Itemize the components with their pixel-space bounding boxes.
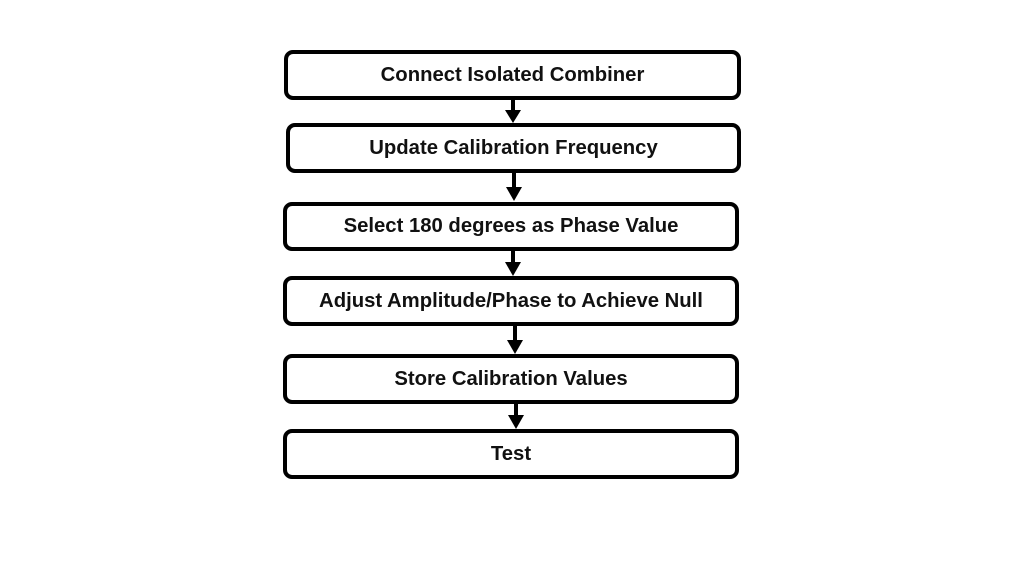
step 2 box xyxy=(286,123,741,173)
step 4 box xyxy=(283,276,739,326)
step 1 box xyxy=(284,50,741,100)
arrow 3 xyxy=(505,251,521,276)
arrow 4 xyxy=(507,326,523,354)
step 2 box: Update Calibration Frequency xyxy=(369,136,658,158)
step 1 box: Connect Isolated Combiner xyxy=(381,64,644,86)
step 6 box: Test xyxy=(491,442,531,464)
step 5 box xyxy=(283,354,739,404)
arrow 1 xyxy=(505,100,521,123)
step 6 box xyxy=(283,429,739,479)
step 5 box: Store Calibration Values xyxy=(394,368,628,390)
step 3 box xyxy=(283,202,739,251)
arrow 5 xyxy=(508,404,524,429)
step 3 box: Select 180 degrees as Phase Value xyxy=(344,215,678,237)
arrow 2 xyxy=(506,173,522,201)
step 4 box: Adjust Amplitude/Phase to Achieve Null xyxy=(319,290,703,312)
